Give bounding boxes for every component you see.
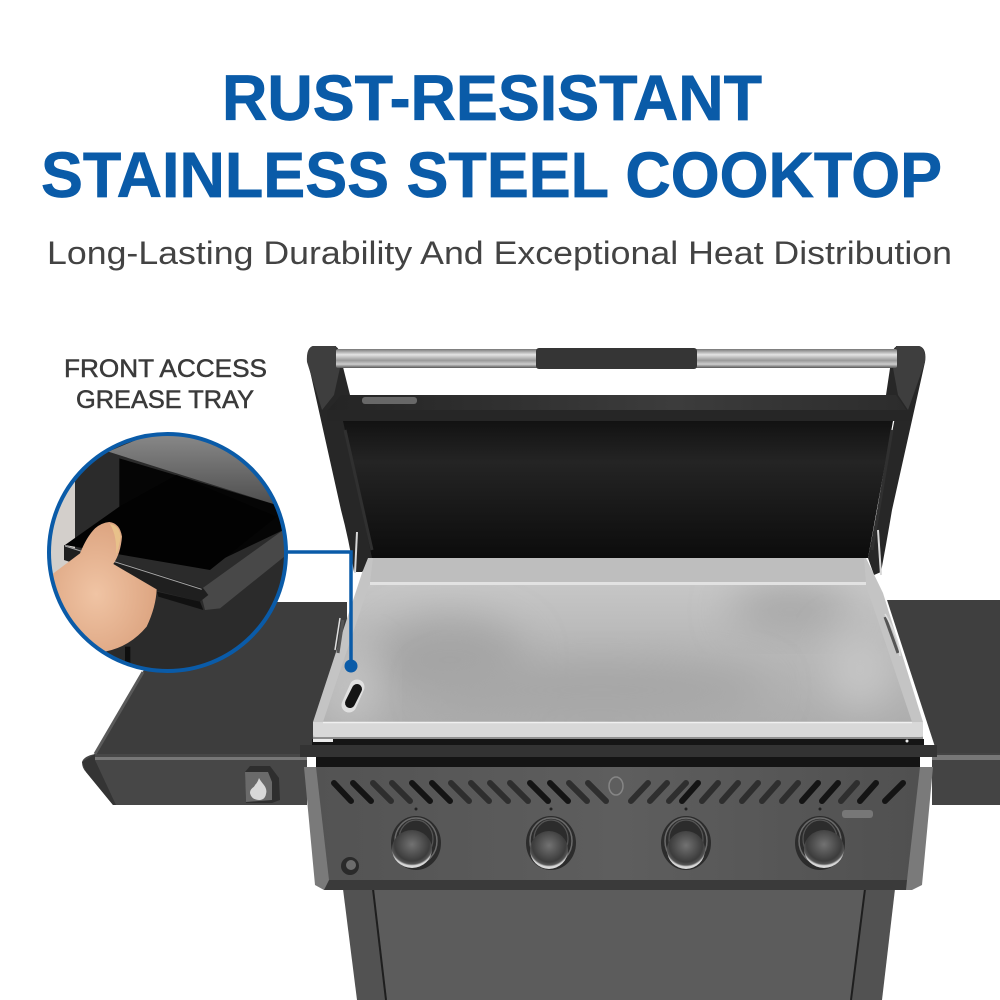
griddle side handles [335, 614, 900, 656]
firebox frame [300, 745, 937, 757]
inset hand [47, 522, 157, 653]
title: RUST-RESISTANT [222, 62, 762, 134]
lid top strip [327, 395, 907, 411]
left side shelf [82, 602, 347, 805]
griddle cooktop [313, 558, 923, 739]
inset background wall [51, 482, 75, 574]
panel logo [842, 810, 873, 818]
right side shelf [887, 600, 1000, 805]
inset tray side [200, 530, 288, 610]
handle rod [336, 349, 897, 368]
knob 4 [795, 808, 845, 870]
griddle ledge highlights [313, 739, 908, 742]
lid struts [345, 430, 892, 550]
lid inner panel [343, 421, 893, 558]
callout label: GREASE TRAY [76, 386, 254, 414]
grill illustration [82, 346, 1000, 1000]
centre flame logo [609, 777, 623, 795]
callout leader line [288, 552, 358, 672]
inset ring [49, 434, 286, 671]
inset grey hood [108, 436, 274, 504]
shelf button with flame icon [245, 766, 280, 803]
inset black cavity [119, 458, 283, 567]
igniter button [341, 857, 359, 875]
title: STAINLESS STEEL COOKTOP [41, 139, 942, 211]
griddle gap [312, 739, 924, 745]
inset lower post [125, 646, 130, 663]
knob 2 [526, 808, 576, 870]
grease slot [349, 687, 357, 705]
control panel [304, 767, 933, 890]
lid logo badge [362, 397, 417, 404]
callout label: FRONT ACCESS [64, 355, 267, 383]
knob 1 [391, 808, 441, 870]
callout label [64, 355, 267, 414]
vent slots [334, 783, 903, 801]
callout inset: grease tray [47, 432, 288, 673]
handle grip [536, 348, 697, 369]
inset lower rail [157, 592, 203, 610]
title [41, 62, 942, 211]
inset tray top [65, 475, 226, 570]
subtitle: Long-Lasting Durability And Exceptional Heat Distribution [47, 235, 952, 271]
inset tray front lip [64, 545, 208, 602]
knob 3 [661, 808, 711, 870]
cart base [343, 889, 895, 1000]
lid support rods [355, 530, 881, 575]
lid brackets and frame [307, 346, 925, 575]
lid trim [327, 410, 910, 421]
black band [316, 757, 920, 767]
inset dark panel [75, 440, 284, 669]
